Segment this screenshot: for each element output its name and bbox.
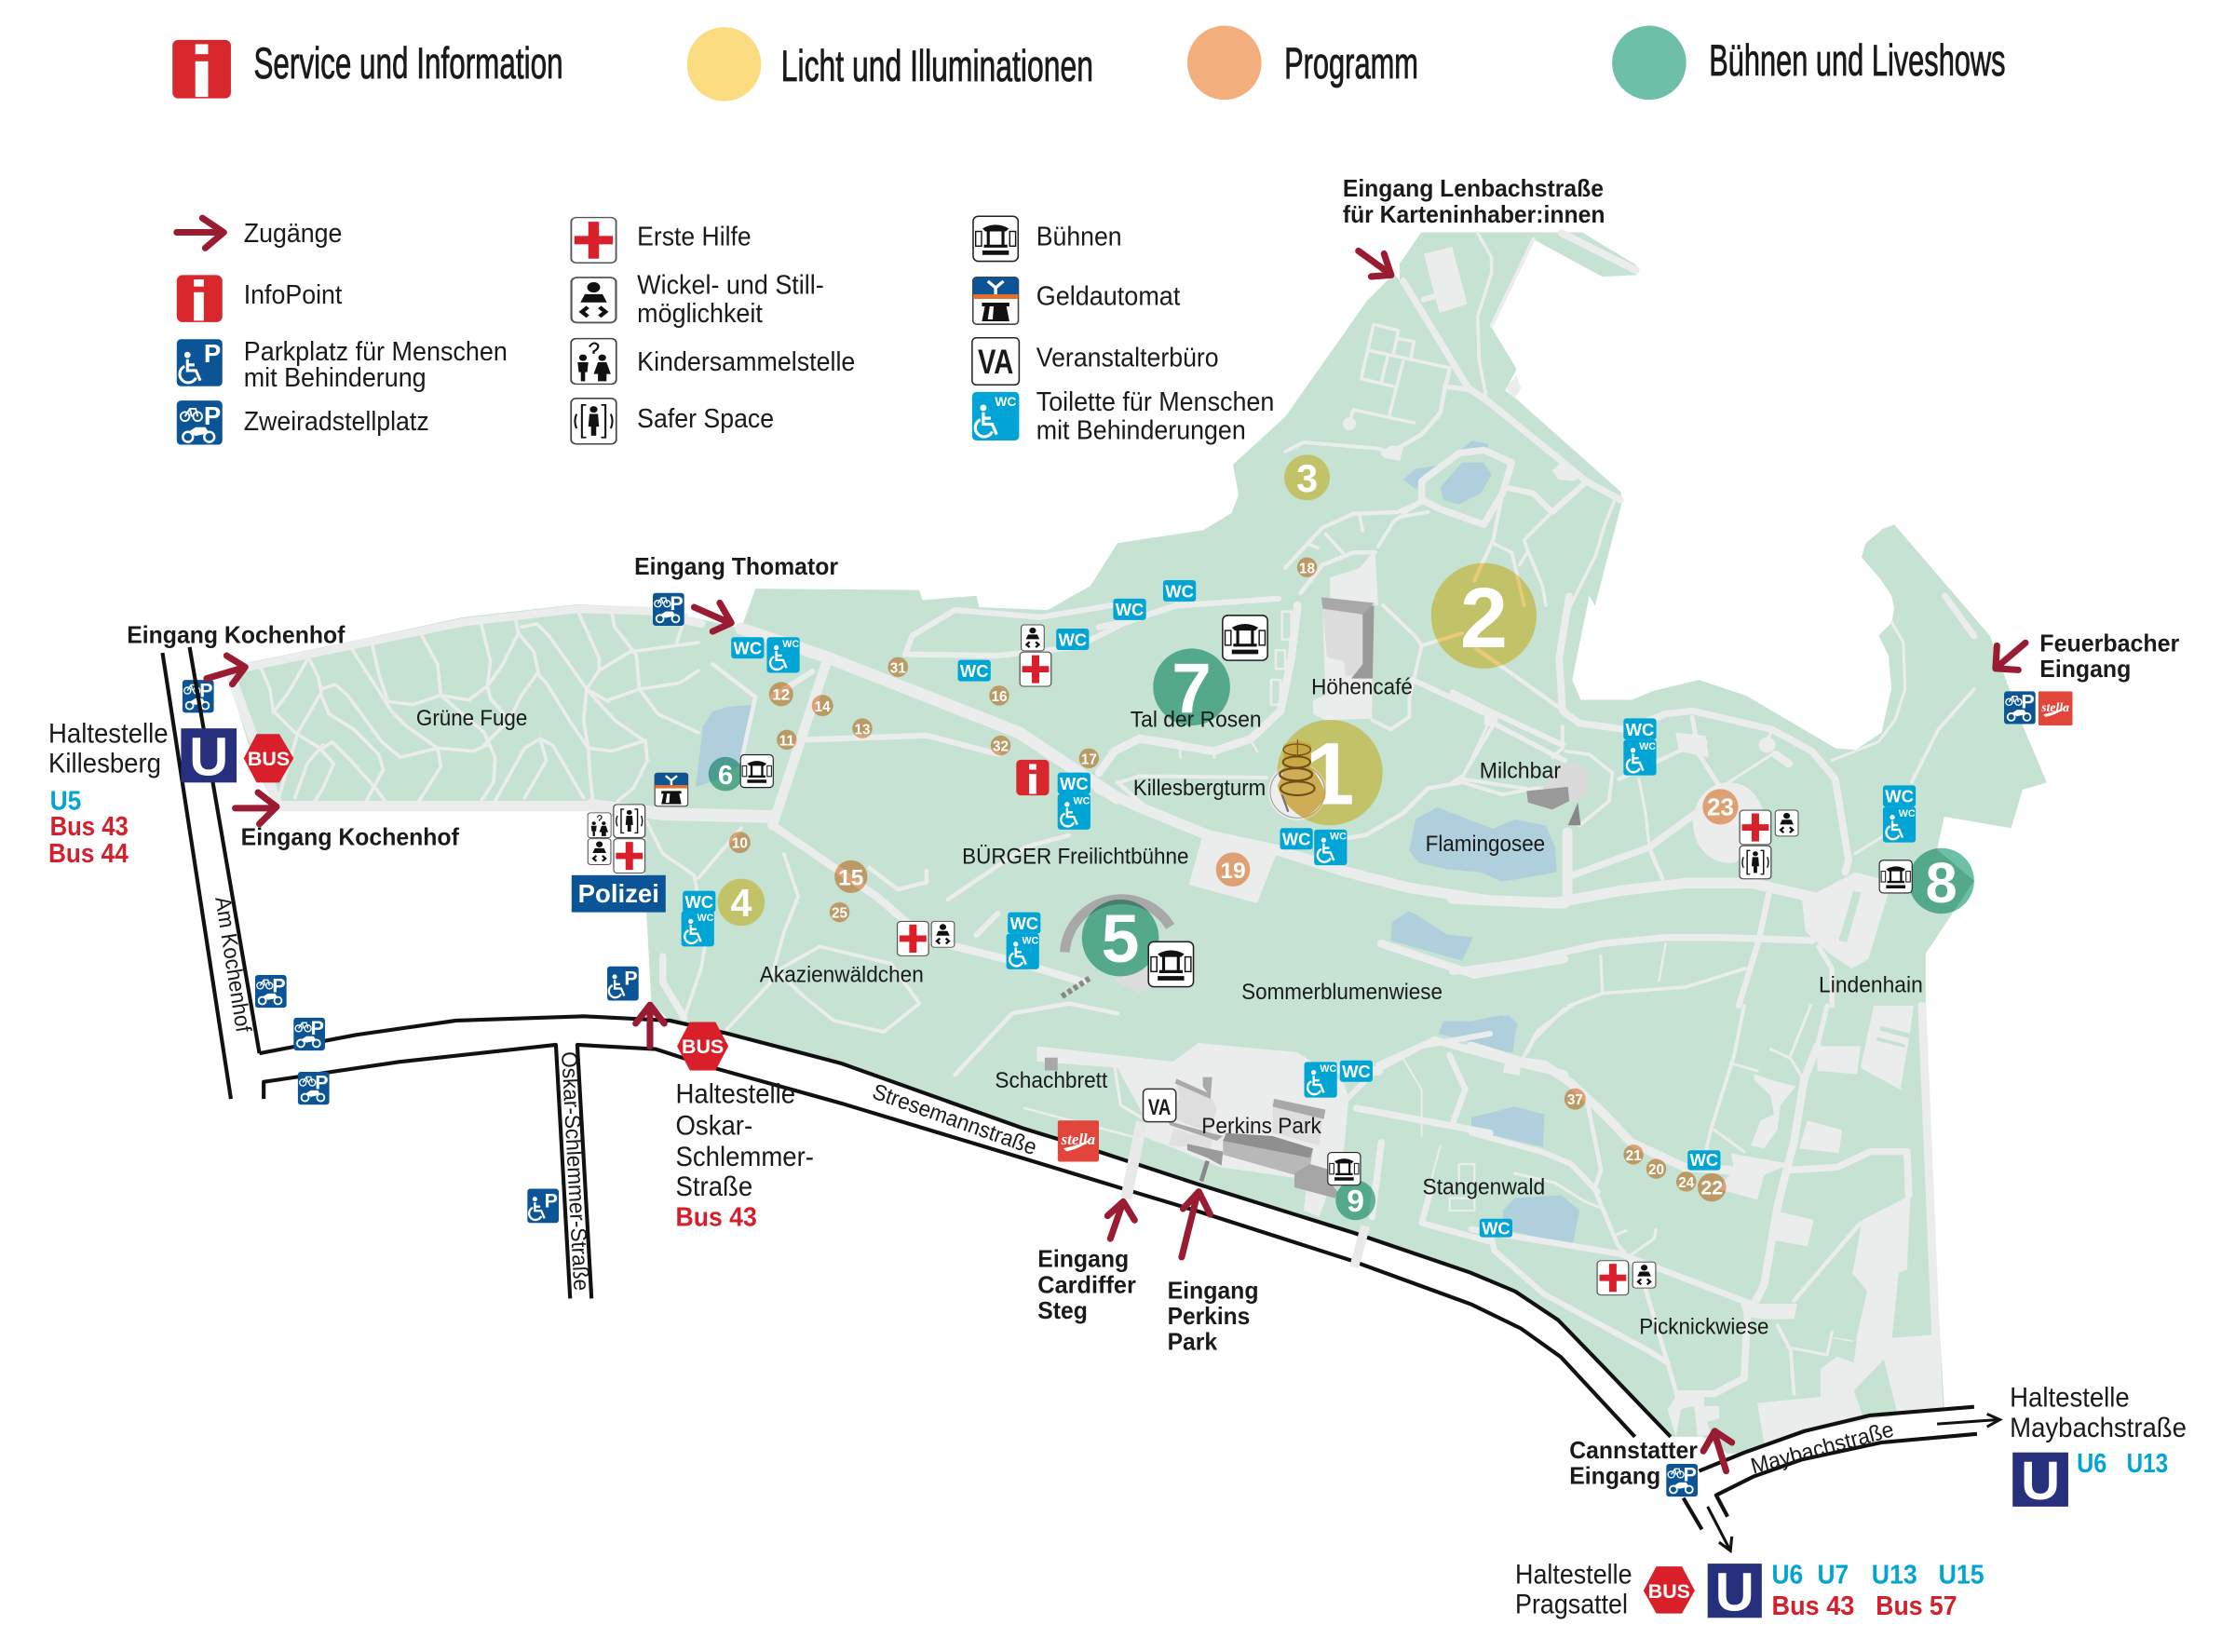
icon: InfoPoint	[177, 275, 223, 322]
icon: WC: WC	[1116, 600, 1144, 619]
icon: stella: stella	[2040, 700, 2069, 714]
label: Grüne Fuge: Grüne Fuge	[416, 707, 527, 731]
icon: accessible WC	[1623, 739, 1657, 776]
icon: accessible parking: P	[545, 1189, 558, 1212]
stop: Pragsattel: Pragsattel	[1515, 1590, 1628, 1620]
paths: Milchbar and Lindenhain	[1453, 596, 1974, 1006]
stop: Pragsattel: BUS	[1648, 1580, 1690, 1603]
marker 6	[709, 757, 742, 791]
legend: service icons	[177, 216, 1274, 445]
marker 10	[729, 832, 751, 853]
label: Oskar-Schlemmer-Straße: Oskar-Schlemmer-Straße	[556, 1051, 592, 1292]
marker 14	[812, 695, 833, 716]
marker 17	[1079, 749, 1099, 768]
label: Cannstatter Eingang: Eingang	[1569, 1461, 1660, 1489]
marker 37: 37	[1567, 1092, 1583, 1108]
icon: accessible WC	[1305, 1062, 1337, 1098]
arrow: Perkins Park	[1182, 1192, 1210, 1257]
plaza: Perkins Park grounds	[1024, 1034, 1490, 1241]
marker 3	[1284, 454, 1330, 500]
icon: bike parking: P	[204, 401, 221, 430]
icon: WC: WC	[960, 661, 988, 681]
label: Cannstatter Eingang	[1569, 1436, 1698, 1489]
label: Feuerbacher Eingang: Feuerbacher	[2039, 629, 2179, 657]
icon: WC: WC	[734, 639, 762, 658]
marker 4: 4	[730, 882, 752, 925]
stop: Killesberg: U5	[50, 785, 81, 815]
arrow: to Maybachstraße	[1937, 1414, 1999, 1427]
icon: bike parking	[298, 1071, 330, 1104]
marker 18	[1297, 557, 1317, 577]
icon: VA organiser office: VA	[978, 343, 1013, 381]
icon: accessible toilet: WC	[995, 395, 1016, 409]
arrow: Thomator	[694, 603, 731, 631]
marker 10: 10	[732, 836, 748, 852]
icon: accessible parking	[527, 1189, 559, 1223]
arrow: Oskar-Schlemmer	[636, 1005, 664, 1046]
header category legend	[172, 26, 2006, 102]
label: Sommerblumenwiese: Sommerblumenwiese	[1241, 981, 1443, 1005]
marker 1: 1	[1306, 724, 1354, 823]
label: Eingang Lenbachstraße	[1343, 174, 1605, 228]
stop: Oskar-Schlemmer-Straße: Oskar-	[676, 1110, 752, 1141]
heading: Licht und Illuminationen: Licht und Illuminationen	[781, 42, 1093, 91]
icon: accessible WC	[1007, 934, 1039, 969]
marker 13	[852, 718, 873, 738]
marker 20: 20	[1648, 1162, 1664, 1178]
label: Eingang Perkins Park: Eingang	[1168, 1276, 1259, 1304]
building: Höhencafé	[1321, 597, 1375, 679]
paths: west centre	[232, 599, 1279, 1075]
heading: Bühnen und Liveshows: Bühnen und Liveshows	[1709, 36, 2006, 86]
icon: bike parking	[177, 400, 223, 445]
stop: Pragsattel: Bus 43	[1772, 1591, 1854, 1620]
icon: bike parking: P	[199, 679, 213, 701]
label: Eingang Cardiffer Steg: Steg	[1037, 1296, 1088, 1324]
marker 16: 16	[991, 689, 1007, 705]
service icons on the map	[183, 580, 2073, 1496]
heading: Service und Information: Service und Information	[253, 39, 563, 88]
icon: WC: WC	[1165, 581, 1194, 601]
marker 2: 2	[1460, 571, 1508, 666]
icon: WC: WC	[1690, 1150, 1718, 1170]
marker 15	[834, 860, 867, 893]
lakes and ponds	[696, 440, 1579, 1245]
icon: bike parking	[2004, 691, 2036, 724]
stop: Maybachstraße: Maybachstraße	[2010, 1413, 2187, 1443]
streets and lines	[162, 647, 1999, 1550]
marker 12	[769, 682, 793, 706]
label: Stangenwald: Stangenwald	[1423, 1176, 1545, 1200]
icon: bike parking: P	[272, 974, 286, 996]
north-east strip	[1534, 232, 1636, 277]
stop: Maybachstraße: U6	[2077, 1448, 2106, 1478]
icon: baby care	[588, 839, 611, 865]
icon: accessible WC: WC	[1022, 935, 1039, 946]
icon: stella: stella	[1061, 1131, 1096, 1148]
label: Parkplatz für Menschen mit Behinderung	[244, 336, 508, 392]
icon: stage	[1328, 1153, 1361, 1185]
icon: yellow circle	[687, 27, 761, 102]
icon: WC: WC	[1342, 1062, 1371, 1081]
icon: Killesberg tower	[1270, 739, 1325, 818]
label: Stresemannstraße: Stresemannstraße	[869, 1080, 1039, 1160]
marker 23	[1702, 789, 1739, 824]
stop: Killesberg: Bus 43	[50, 811, 129, 841]
marker 25	[830, 902, 849, 922]
stop: Killesberg: Killesberg	[48, 749, 161, 779]
label: Toilette für Menschen mit Behinderungen	[1036, 386, 1274, 444]
stop: Pragsattel	[1515, 1560, 1984, 1623]
arrow: Lenbachstraße	[1359, 251, 1391, 277]
stop: Pragsattel: U7	[1818, 1560, 1849, 1590]
marker 11	[777, 730, 797, 750]
marker 20	[1646, 1158, 1666, 1179]
stop: Oskar-Schlemmer-Straße: Bus 43	[676, 1201, 757, 1231]
numbered programme markers	[709, 454, 1974, 1220]
icon: baby care	[1022, 625, 1044, 651]
label: Eingang Cardiffer Steg: Eingang	[1037, 1245, 1129, 1273]
label: Perkins Park: Perkins Park	[1201, 1115, 1321, 1139]
icon: accessible WC: WC	[1330, 832, 1347, 843]
label: Eingang Kochenhof north: Eingang Kochenhof	[127, 620, 345, 648]
icon: service info	[172, 40, 231, 99]
marker 31	[888, 657, 908, 677]
label: Feuerbacher Eingang	[2039, 629, 2179, 683]
icon: stella	[2039, 691, 2073, 725]
arrow: to Pragsattel	[1708, 1507, 1732, 1550]
stop: Killesberg: Bus 44	[48, 838, 129, 868]
icon: accessible WC	[766, 637, 800, 672]
label: Eingang Cardiffer Steg	[1037, 1245, 1136, 1324]
icon: cash machine	[655, 773, 688, 806]
label: Eingang Perkins Park: Perkins	[1168, 1302, 1250, 1330]
icon: accessible WC	[1058, 794, 1090, 830]
arrow: Cannstatter	[1703, 1431, 1732, 1471]
marker 17: 17	[1081, 752, 1097, 767]
icon: WC: WC	[1885, 787, 1914, 806]
label: Flamingosee: Flamingosee	[1426, 833, 1545, 857]
heading: Programm: Programm	[1284, 39, 1418, 88]
marker 11: 11	[779, 734, 794, 750]
marker 24: 24	[1678, 1175, 1695, 1191]
transit stops	[48, 718, 2187, 1623]
icon: first aid	[1740, 810, 1771, 845]
icon: accessible toilet	[972, 392, 1019, 440]
stop: Oskar-Schlemmer-Straße: BUS	[682, 1036, 724, 1058]
stop: Maybachstraße: Haltestelle	[2010, 1383, 2130, 1414]
stop: Killesberg: Haltestelle	[48, 718, 169, 749]
marker 18: 18	[1299, 561, 1316, 576]
marker 19: 19	[1220, 859, 1246, 884]
label: Eingang Cardiffer Steg: Cardiffer	[1037, 1270, 1136, 1298]
entrance labels	[127, 174, 2179, 1489]
marker 25: 25	[832, 906, 848, 922]
icon: baby care	[572, 278, 616, 322]
marker 31: 31	[890, 660, 906, 676]
marker 16	[989, 685, 1009, 706]
marker 32: 32	[993, 739, 1009, 755]
icon: bike parking: P	[1684, 1463, 1697, 1485]
icon: VA office: VA	[1148, 1095, 1172, 1120]
icon: WC: WC	[1060, 774, 1089, 793]
stop: Killesberg	[48, 718, 293, 868]
icon: bike parking: P	[670, 592, 684, 615]
icon: Polizei: Polizei	[578, 879, 659, 908]
icon: stage	[1879, 860, 1912, 893]
label: Maybachstraße: Maybachstraße	[1748, 1418, 1896, 1479]
label: Parkplatz für Menschen mit Behinderung: mit Behinderung	[244, 362, 427, 392]
marker 21	[1623, 1144, 1644, 1165]
marker 13: 13	[855, 722, 871, 738]
icon: accessible WC: WC	[1639, 741, 1656, 752]
marker 7	[1153, 648, 1230, 728]
icon: accessible WC: WC	[782, 639, 799, 650]
roads	[260, 1016, 1671, 1437]
icon: safer space	[1740, 846, 1771, 879]
label: Tal der Rosen: Tal der Rosen	[1131, 709, 1262, 733]
icon: accessible parking	[607, 967, 639, 1001]
stop: Pragsattel: Haltestelle	[1515, 1560, 1632, 1591]
stop: Oskar-Schlemmer-Straße	[676, 1022, 814, 1231]
icon: accessible WC	[682, 911, 714, 946]
icon: WC: WC	[1626, 720, 1654, 739]
arrow: Feuerbacher	[1996, 643, 2025, 670]
label: Schachbrett: Schachbrett	[995, 1069, 1108, 1093]
icon: stage	[973, 216, 1018, 262]
icon: WC: WC	[1058, 630, 1087, 649]
graphic: Schachbrett	[1045, 1058, 1058, 1071]
icon: bike parking: P	[2021, 691, 2035, 713]
label: Eingang Thomator: Eingang Thomator	[634, 552, 838, 580]
icon: accessible WC: WC	[1074, 795, 1090, 806]
label: Zweiradstellplatz: Zweiradstellplatz	[244, 406, 429, 436]
icon: bike parking: P	[315, 1071, 329, 1093]
road: Maybachstraße	[1684, 1407, 1977, 1529]
icon: first aid	[1020, 652, 1051, 686]
label: Zugänge: Zugänge	[244, 218, 342, 248]
label: Safer Space: Safer Space	[637, 403, 774, 433]
marker 23: 23	[1707, 793, 1734, 821]
marker 4	[718, 879, 765, 926]
icon: stage	[740, 755, 773, 788]
road: Am Kochenhof	[162, 647, 260, 1099]
icon: baby care	[1632, 1262, 1656, 1288]
icon: children meeting point	[588, 813, 611, 838]
road: Stresemannstraße lower edge	[264, 1045, 1635, 1437]
icon: bike parking	[653, 592, 684, 626]
icon: WC: WC	[1009, 914, 1038, 933]
icon: bike parking: P	[311, 1017, 324, 1039]
label: Picknickwiese: Picknickwiese	[1639, 1316, 1768, 1340]
road gate: east crossing	[1354, 1225, 1365, 1267]
label: Am Kochenhof: Am Kochenhof	[210, 895, 255, 1035]
label: Wickel- und Stillmöglichkeit	[637, 269, 824, 328]
entrance arrows	[207, 251, 2025, 1471]
icon: safer space	[571, 399, 616, 444]
label: Wickel- und Stillmöglichkeit: möglichkeit	[637, 298, 763, 328]
icon: bike parking	[183, 679, 214, 712]
paths: Tal der Rosen and Flamingosee	[1099, 605, 1564, 1074]
marker 14: 14	[815, 699, 831, 715]
marker 37	[1564, 1089, 1586, 1110]
label: Eingang Kochenhof south: Eingang Kochenhof	[241, 823, 459, 851]
icon: accessible WC	[1883, 806, 1916, 843]
stop: Oskar-Schlemmer-Straße: Haltestelle	[676, 1079, 795, 1110]
panel: park map base	[228, 232, 2047, 1454]
label: Feuerbacher Eingang: Eingang	[2039, 655, 2131, 683]
stop: Oskar-Schlemmer-Straße: Schlemmer-	[676, 1142, 814, 1172]
road: Stresemannstraße upper edge	[260, 1016, 1671, 1437]
label: Milchbar: Milchbar	[1480, 760, 1561, 784]
marker 7: 7	[1172, 649, 1212, 728]
paths: north garden	[1285, 233, 1636, 605]
label: Veranstalterbüro: Veranstalterbüro	[1036, 342, 1219, 372]
icon: Polizei	[572, 875, 666, 913]
icon: bike parking	[293, 1017, 325, 1050]
stop: Pragsattel: U6	[1772, 1560, 1803, 1590]
marker 19	[1216, 852, 1250, 887]
icon: accessible parking: P	[204, 339, 221, 368]
label: Toilette für Menschen mit Behinderungen: mit Behinderungen	[1036, 414, 1246, 444]
marker 6: 6	[718, 761, 733, 791]
icon: first aid	[1597, 1261, 1629, 1295]
icon: orange circle	[1187, 26, 1262, 100]
icon: accessible WC: WC	[1320, 1063, 1336, 1075]
icon: green circle	[1612, 26, 1686, 100]
icon: VA office	[1144, 1089, 1176, 1122]
paths and plazas: Grüne Fuge	[247, 233, 1974, 1443]
icon: children meeting point	[571, 339, 616, 384]
arrow: Cardiffer Steg	[1107, 1201, 1134, 1239]
building: Perkins Park	[1167, 1077, 1338, 1198]
icon: WC: WC	[1482, 1219, 1510, 1239]
icon: safer space	[614, 805, 645, 837]
stop: Killesberg: U	[189, 727, 228, 788]
icon: WC: WC	[1282, 830, 1310, 849]
icon: first aid	[898, 921, 928, 955]
stop: Pragsattel: U	[1715, 1563, 1754, 1623]
icon: accessible WC: WC	[1899, 808, 1916, 819]
icon: WC: WC	[684, 892, 713, 912]
marker 32	[991, 736, 1010, 755]
road gate: Cardiffer Steg	[1126, 1122, 1142, 1198]
icon: accessible parking: P	[624, 968, 638, 990]
icon: baby care	[1775, 810, 1798, 836]
paths: south-east quarter	[1471, 1006, 1942, 1443]
icon: bike parking	[1666, 1463, 1698, 1496]
label: Bühnen: Bühnen	[1036, 221, 1122, 251]
stop: Maybachstraße: U	[2021, 1451, 2060, 1511]
marker 3: 3	[1296, 457, 1318, 500]
label: Cannstatter Eingang: Cannstatter	[1569, 1436, 1698, 1464]
stop: Oskar-Schlemmer-Straße: Straße	[676, 1171, 752, 1202]
stop: Pragsattel: U15	[1939, 1560, 1984, 1590]
arrow: Kochenhof south	[236, 792, 277, 824]
icon: bike parking	[255, 974, 287, 1008]
icon: accessible parking	[177, 339, 223, 386]
icon: VA organiser office	[972, 338, 1019, 385]
icon: stage	[1223, 616, 1267, 660]
label: Geldautomat: Geldautomat	[1036, 281, 1180, 311]
label: Eingang Perkins Park	[1168, 1276, 1259, 1356]
icon: InfoPoint	[1016, 760, 1050, 795]
label: BÜRGER Freilichtbühne: BÜRGER Freilichtbühne	[962, 845, 1189, 870]
marker 5: 5	[1102, 900, 1139, 977]
place names	[416, 675, 1923, 1340]
marker 2	[1431, 563, 1537, 669]
label: Eingang Perkins Park: Park	[1168, 1328, 1218, 1356]
icon: stella	[1058, 1120, 1099, 1161]
stop: Maybachstraße	[2010, 1383, 2187, 1511]
icon: first aid	[571, 218, 616, 263]
marker 21: 21	[1626, 1148, 1642, 1164]
stop: Killesberg: BUS	[248, 748, 290, 770]
label: Wickel- und Stillmöglichkeit: Wickel- und Still-	[637, 269, 824, 299]
marker 8	[1908, 848, 1974, 914]
label: Erste Hilfe: Erste Hilfe	[637, 221, 752, 251]
marker 1	[1277, 720, 1383, 825]
icon: accessible WC: WC	[697, 913, 714, 924]
marker 9: 9	[1347, 1185, 1364, 1219]
stop: Pragsattel: U13	[1872, 1560, 1917, 1590]
marker 24	[1676, 1171, 1696, 1192]
park area	[228, 232, 2047, 1454]
label: Eingang Lenbachstraße: Eingang Lenbachstraße	[1343, 174, 1604, 202]
label: Toilette für Menschen mit Behinderungen: Toilette für Menschen	[1036, 386, 1274, 416]
stop: Maybachstraße: U13	[2127, 1448, 2168, 1478]
marker 5	[1082, 900, 1158, 977]
icon: first aid	[614, 839, 645, 873]
label: Parkplatz für Menschen mit Behinderung: Parkplatz für Menschen	[244, 336, 508, 366]
marker 22: 22	[1700, 1177, 1723, 1199]
label: Höhencafé: Höhencafé	[1311, 675, 1413, 699]
label: Kindersammelstelle: Kindersammelstelle	[637, 346, 855, 376]
marker 22	[1698, 1173, 1727, 1201]
label: Killesbergturm: Killesbergturm	[1133, 777, 1266, 801]
stop: Pragsattel: Bus 57	[1876, 1591, 1957, 1620]
label: InfoPoint: InfoPoint	[244, 279, 342, 309]
icon: accessible WC	[1314, 830, 1347, 865]
marker 8: 8	[1926, 851, 1957, 914]
arrow: Kochenhof north	[207, 656, 245, 684]
icon: stage	[1148, 941, 1194, 987]
building: Milchbar	[1526, 763, 1588, 825]
arrow: Zugänge	[177, 218, 224, 248]
marker 9	[1335, 1180, 1375, 1220]
marker 15: 15	[838, 866, 863, 891]
label: Eingang Lenbachstraße: für Karteninhaber:innen	[1343, 200, 1605, 228]
open-air stage stands	[1062, 900, 1171, 996]
footpath network	[232, 233, 1974, 1443]
label: Lindenhain: Lindenhain	[1819, 973, 1923, 997]
marker 12: 12	[772, 686, 790, 704]
icon: cash machine	[973, 278, 1019, 324]
label: Akazienwäldchen: Akazienwäldchen	[760, 964, 924, 988]
icon: baby care	[931, 921, 955, 947]
